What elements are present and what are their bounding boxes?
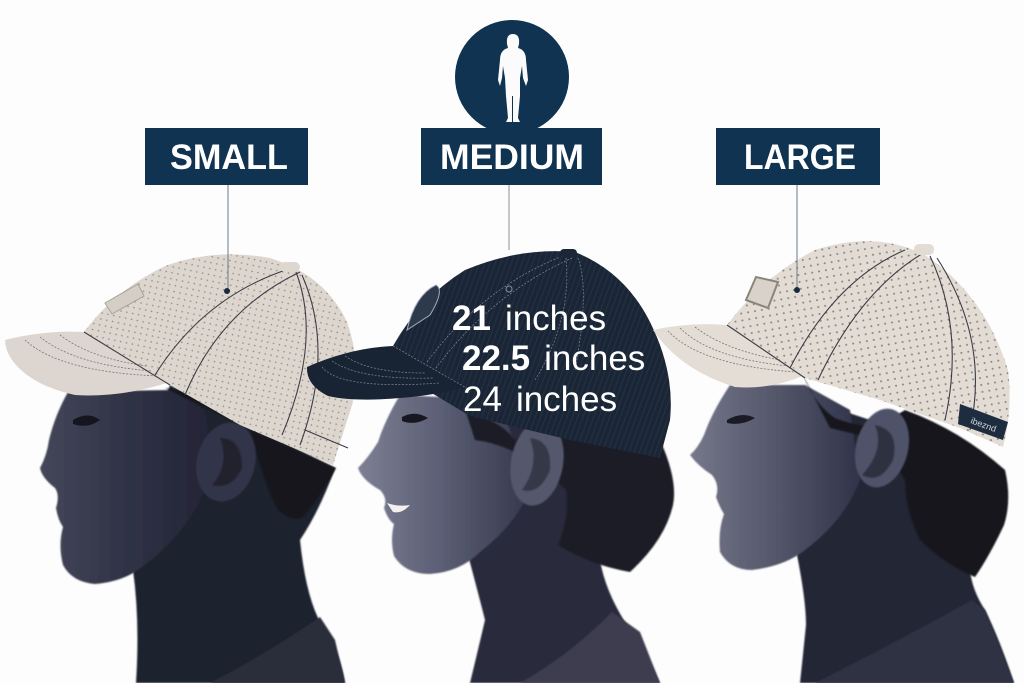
label: small: [145, 128, 308, 185]
measurement: 24 inches: 24 inches: [463, 380, 617, 419]
label: small: SMALL: [170, 138, 288, 177]
label: medium: MEDIUM: [440, 138, 584, 177]
label: large: LARGE: [744, 138, 856, 177]
cap: large: ibeznd: [969, 415, 998, 434]
pointer: small: [224, 185, 230, 294]
pointer: large: [794, 185, 800, 293]
cap: medium: [307, 249, 671, 458]
label: medium: [421, 128, 602, 185]
measurement: 22.5 inches: 22.5 inches: [462, 339, 645, 378]
icon: body figure badge: [455, 20, 569, 134]
person: large: [690, 375, 1014, 683]
person: medium: [358, 395, 674, 683]
cap: small: [5, 254, 356, 465]
pointer: medium: [508, 185, 510, 250]
cap: large: [653, 241, 1010, 447]
label: large: [716, 128, 880, 185]
person: small: [40, 385, 345, 683]
measurement: 21 inches: 21 inches: [452, 299, 606, 338]
